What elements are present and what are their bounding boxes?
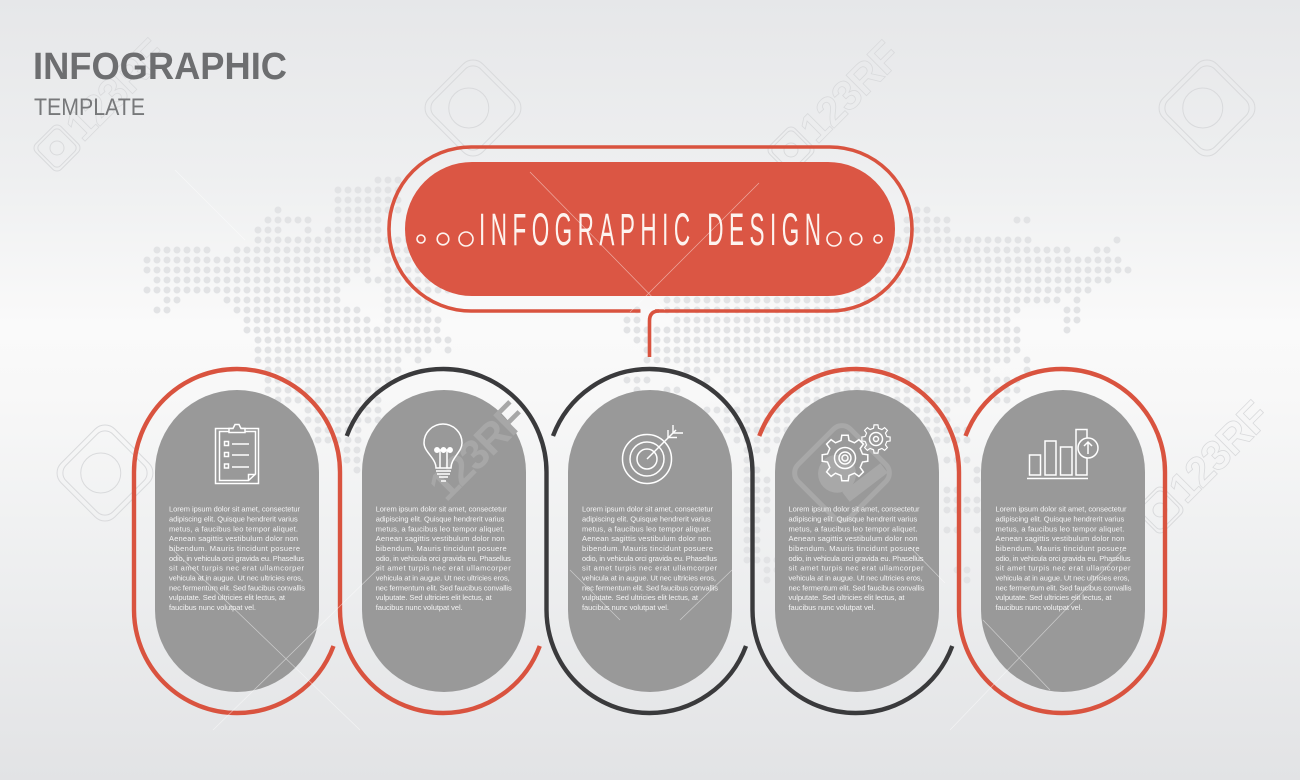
card 2 text: Aenean sagittis vestibulum dolor non: [376, 534, 505, 543]
card 3 text: bibendum. Mauris tincidunt posuere: [582, 544, 713, 553]
card 2 text: bibendum. Mauris tincidunt posuere: [376, 544, 507, 553]
card 3 text: metus, a faucibus leo tempor aliquet.: [582, 524, 711, 533]
header outer ring: [389, 147, 912, 311]
icon: target with arrow: [622, 425, 683, 484]
card 5 text: nec fermentum elit. Sed faucibus convallis: [996, 583, 1132, 592]
red ring 1 and lower ring 2: [134, 369, 540, 713]
card 2 text: metus, a faucibus leo tempor aliquet.: [376, 524, 505, 533]
card 4 text: faucibus nunc volutpat vel.: [788, 603, 876, 612]
card 3 text: sit amet turpis nec erat ullamcorper: [582, 564, 718, 573]
watermark marks on background: [28, 30, 1279, 540]
watermark on card 4: [790, 421, 894, 525]
card 1 text: metus, a faucibus leo tempor aliquet.: [169, 524, 298, 533]
card 1 text: Aenean sagittis vestibulum dolor non: [169, 534, 298, 543]
card 2 text: Lorem ipsum dolor sit amet, consectetur: [376, 505, 507, 514]
card 3 text: vehicula at in augue. Ut nec ultricies eros,: [582, 574, 716, 582]
watermark on card 2: 123RF: [419, 393, 536, 509]
card 2 text: faucibus nunc volutpat vel.: [376, 603, 463, 612]
thin diagonal watermark lines: [170, 170, 1123, 730]
card 4 text: vehicula at in augue. Ut nec ultricies eros,: [788, 574, 922, 582]
card 5 text: adipiscing elit. Quisque hendrerit varius: [996, 514, 1124, 524]
card 3 background: [568, 390, 732, 692]
card 3 text: Lorem ipsum dolor sit amet, consectetur: [582, 505, 714, 514]
card 1 text: vulputate. Sed ultricies elit lectus, at: [169, 593, 286, 602]
title block: [33, 46, 287, 121]
card 2 text: vulputate. Sed ultricies elit lectus, at: [376, 593, 493, 602]
card 5 text: Lorem ipsum dolor sit amet, consectetur: [996, 505, 1127, 514]
watermark: top left: [28, 30, 176, 178]
header pill: [405, 162, 895, 296]
card 5 text: Aenean sagittis vestibulum dolor non: [996, 534, 1124, 543]
card 5 text: bibendum. Mauris tincidunt posuere: [996, 544, 1126, 553]
card 5 text: metus, a faucibus leo tempor aliquet.: [996, 524, 1124, 533]
card 4 text: sit amet turpis nec erat ullamcorper: [788, 564, 924, 573]
panel: card 2: [362, 390, 536, 692]
card 4 text: metus, a faucibus leo tempor aliquet.: [788, 524, 918, 533]
card 1 text: Lorem ipsum dolor sit amet, consectetur: [169, 505, 300, 514]
watermark: top centre right: 123RF: [790, 32, 910, 151]
connector line from header to cards: [650, 311, 659, 357]
card 5 text: sit amet turpis nec erat ullamcorper: [996, 564, 1131, 573]
card 3 text: nec fermentum elit. Sed faucibus convallis: [582, 583, 718, 592]
dark ring 3 and lower ring 4: [553, 369, 952, 713]
card 3 text: [582, 505, 718, 612]
card 1 text: odio, in vehicula orci gravida eu. Phasellus: [169, 554, 304, 563]
card 1 text: vehicula at in augue. Ut nec ultricies eros,: [169, 574, 303, 582]
card 3 text: adipiscing elit. Quisque hendrerit varius: [582, 514, 711, 524]
card 5 text: vulputate. Sed ultricies elit lectus, at: [996, 593, 1112, 602]
decorative circles: [417, 232, 882, 246]
title: INFOGRAPHIC: [33, 46, 287, 88]
card 2 text: nec fermentum elit. Sed faucibus convallis: [376, 583, 512, 592]
card 4 text: odio, in vehicula orci gravida eu. Phasellus: [788, 554, 924, 563]
panel: card 4: [775, 390, 939, 692]
card 1 background: [155, 390, 319, 692]
card 2 text: odio, in vehicula orci gravida eu. Phasellus: [376, 554, 511, 563]
card 4 text: nec fermentum elit. Sed faucibus convallis: [788, 583, 925, 592]
card 1 text: adipiscing elit. Quisque hendrerit varius: [169, 514, 298, 524]
icon: bar chart with up arrow: [1027, 430, 1098, 478]
card 3 text: Aenean sagittis vestibulum dolor non: [582, 534, 711, 543]
watermark: top left: 123RF: [56, 30, 176, 149]
card 1 text: [169, 505, 305, 612]
icon: gears: [822, 425, 890, 481]
card 5 background: [981, 390, 1145, 692]
card 5 text: vehicula at in augue. Ut nec ultricies eros,: [996, 574, 1130, 582]
card 3 text: odio, in vehicula orci gravida eu. Phasellus: [582, 554, 717, 563]
watermark: top right egg: [1153, 54, 1261, 162]
watermark: left egg: [51, 419, 159, 527]
card 4 text: vulputate. Sed ultricies elit lectus, at: [788, 593, 905, 602]
icon: clipboard: [216, 424, 258, 484]
watermark: top centre right: [762, 32, 910, 180]
panel: card 5: [981, 390, 1145, 692]
subtitle: TEMPLATE: [34, 94, 145, 121]
card 2 text: adipiscing elit. Quisque hendrerit varius: [376, 514, 505, 524]
card 4 text: adipiscing elit. Quisque hendrerit varius: [788, 514, 917, 524]
card 4 text: Aenean sagittis vestibulum dolor non: [788, 534, 918, 543]
icon: light bulb: [424, 424, 462, 481]
card 2 background: [362, 390, 526, 692]
card 4 text: Lorem ipsum dolor sit amet, consectetur: [788, 505, 920, 514]
card 1 text: faucibus nunc volutpat vel.: [169, 603, 256, 612]
card 5 text: odio, in vehicula orci gravida eu. Phasellus: [996, 554, 1131, 563]
interlocking ring segments: [134, 369, 1165, 713]
header badge: [389, 147, 912, 311]
card 1 text: nec fermentum elit. Sed faucibus convallis: [169, 583, 305, 592]
card 5 text: [996, 505, 1132, 612]
card 5 text: faucibus nunc volutpat vel.: [996, 603, 1082, 612]
red ring 4 and ring 5: [759, 369, 1165, 713]
card 4 background: [775, 390, 939, 692]
card 1 text: bibendum. Mauris tincidunt posuere: [169, 544, 300, 553]
card 2 text: [376, 505, 512, 612]
card 4 text: bibendum. Mauris tincidunt posuere: [788, 544, 920, 553]
card 3 text: faucibus nunc volutpat vel.: [582, 603, 669, 612]
dark ring 2 and lower ring 3: [347, 369, 746, 713]
watermark: right: [1131, 392, 1279, 540]
panel: card 1: [155, 390, 319, 692]
panel: card 3: [568, 390, 732, 692]
watermark: right: 123RF: [1159, 392, 1279, 511]
header text: INFOGRAPHIC DESIGN: [479, 205, 821, 255]
card 2 text: sit amet turpis nec erat ullamcorper: [376, 564, 511, 573]
card 2 text: vehicula at in augue. Ut nec ultricies eros,: [376, 574, 510, 582]
card 3 text: vulputate. Sed ultricies elit lectus, at: [582, 593, 699, 602]
watermark: top centre egg: [419, 54, 527, 162]
card 1 text: sit amet turpis nec erat ullamcorper: [169, 564, 304, 573]
dotted world map: [147, 180, 1137, 580]
card 4 text: [788, 505, 925, 612]
